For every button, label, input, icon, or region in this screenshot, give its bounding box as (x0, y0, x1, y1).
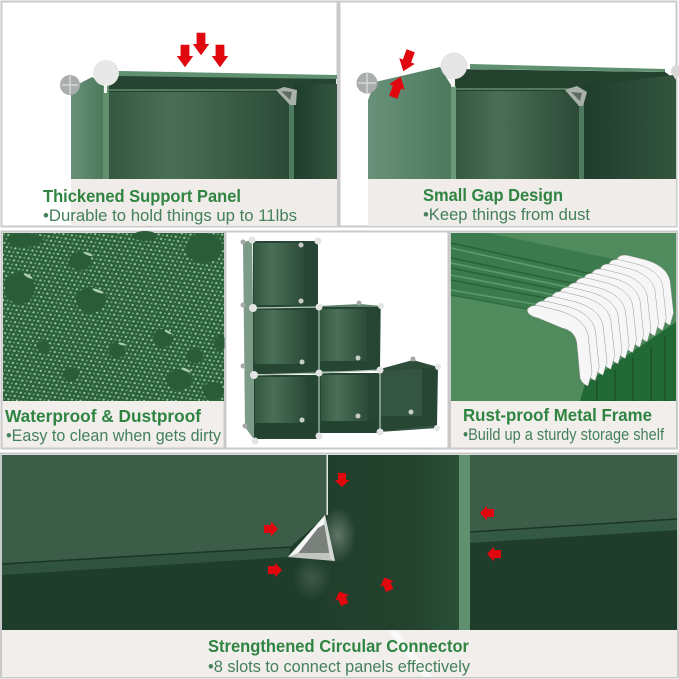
arrows: small gap (386, 48, 418, 100)
third column (381, 368, 437, 431)
description: •8 slots to connect panels effectively (208, 658, 471, 676)
top cube (253, 241, 318, 308)
caption band (2, 630, 677, 677)
left side panels (243, 240, 255, 441)
panel: product photo (226, 232, 448, 448)
shelf photo (60, 60, 337, 179)
metal frame photo (451, 233, 676, 401)
panel: thickened support panel (2, 2, 338, 226)
middle cube (253, 308, 319, 374)
cube shelf (240, 236, 441, 444)
heading: Strengthened Circular Connector (208, 636, 469, 656)
panel: rust-proof metal frame (450, 232, 677, 448)
heading: Small Gap Design (423, 185, 563, 205)
panel: waterproof and dustproof (2, 231, 226, 448)
description: •Durable to hold things up to 11lbs (43, 207, 297, 225)
dark green far face (580, 322, 676, 401)
description: •Easy to clean when gets dirty (6, 427, 222, 445)
shelf photo (356, 53, 679, 179)
connectors (248, 236, 441, 444)
second column upper (319, 307, 380, 371)
back cube tops (319, 304, 381, 373)
panel: strengthened circular connector (1, 454, 678, 678)
description: •Keep things from dust (423, 206, 590, 224)
heading: Rust-proof Metal Frame (463, 405, 652, 425)
bottom cube (254, 375, 319, 439)
frame lines (253, 307, 380, 436)
red arrows (264, 473, 501, 607)
caption band (71, 179, 337, 226)
water droplets photo (3, 231, 226, 401)
white metal ribbons (527, 255, 674, 386)
heading: Thickened Support Panel (43, 186, 241, 206)
caption band (368, 179, 676, 226)
panel: small gap design (340, 2, 679, 226)
second column lower (319, 373, 380, 433)
arrows: pressing down (177, 33, 228, 67)
heading: Waterproof & Dustproof (5, 406, 201, 426)
connector photo (2, 455, 677, 630)
